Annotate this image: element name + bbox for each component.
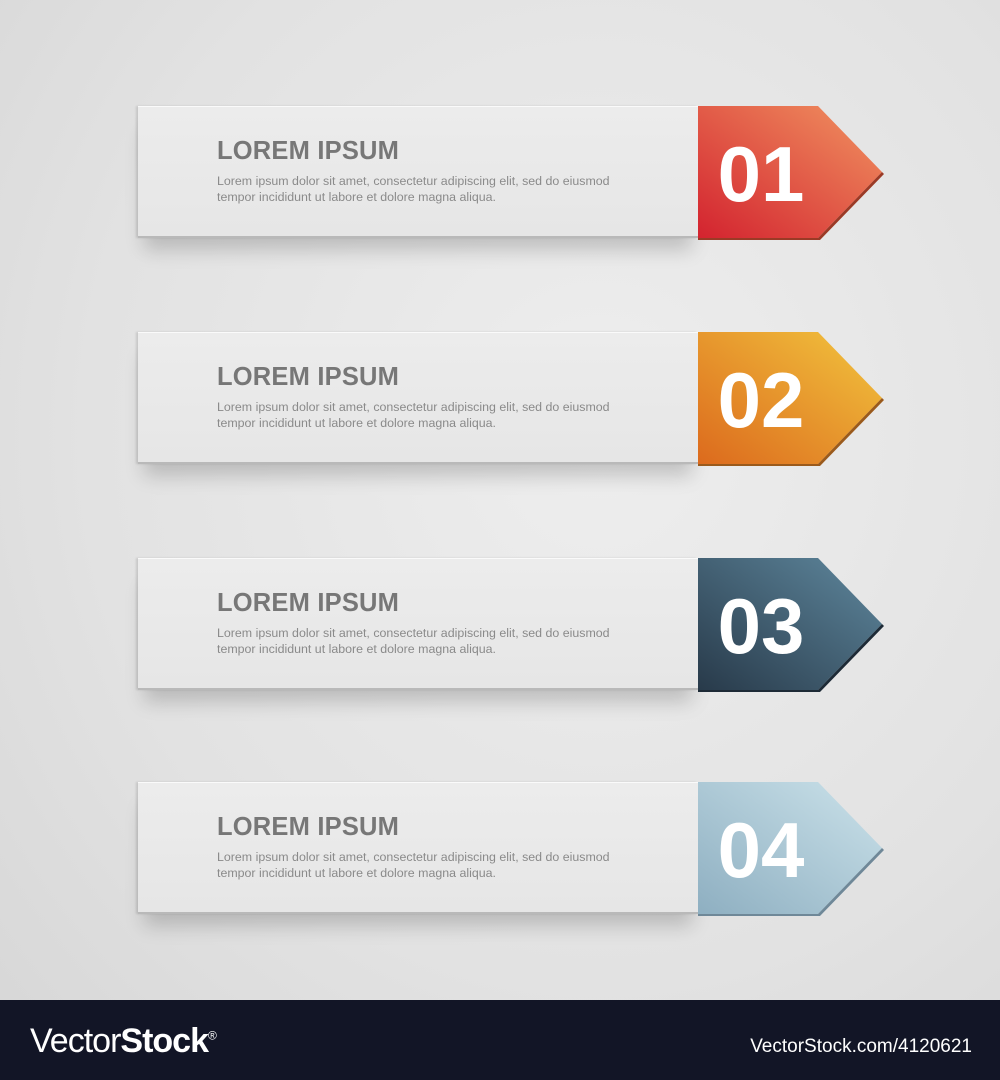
arrow 01 [698,106,884,240]
card 04: tempor incididunt ut labore et dolore magna aliqua. [217,866,496,880]
card 04: Lorem ipsum dolor sit amet, consectetur adipiscing elit, sed do eiusmod [217,850,610,864]
row 03 [134,558,884,710]
card 03: LOREM IPSUM [217,589,399,617]
card 01: tempor incididunt ut labore et dolore magna aliqua. [217,190,496,204]
card 04: LOREM IPSUM [217,813,399,841]
arrow 04 [698,782,884,916]
number 01: 01 [718,130,804,218]
card 01: Lorem ipsum dolor sit amet, consectetur adipiscing elit, sed do eiusmod [217,174,610,188]
card 02 [138,332,698,464]
card 02: LOREM IPSUM [217,363,399,391]
card 02: Lorem ipsum dolor sit amet, consectetur adipiscing elit, sed do eiusmod [217,400,610,414]
card 01: LOREM IPSUM [217,137,399,165]
card 02: tempor incididunt ut labore et dolore magna aliqua. [217,416,496,430]
row 01 [134,106,884,258]
number 03: 03 [718,582,804,670]
url: VectorStock.com/4120621 [750,1036,972,1057]
card 03 [138,558,698,690]
row 02 [134,332,884,484]
card 01 [138,106,698,238]
number 04: 04 [718,806,804,894]
row 04 [134,782,884,934]
arrow 03 [698,558,884,692]
number 02: 02 [718,356,804,444]
logo: VectorStock® [30,1022,216,1060]
arrow 02 [698,332,884,466]
card 03: tempor incididunt ut labore et dolore magna aliqua. [217,642,496,656]
card 04 [138,782,698,914]
footer [0,1000,1000,1080]
card 03: Lorem ipsum dolor sit amet, consectetur adipiscing elit, sed do eiusmod [217,626,610,640]
